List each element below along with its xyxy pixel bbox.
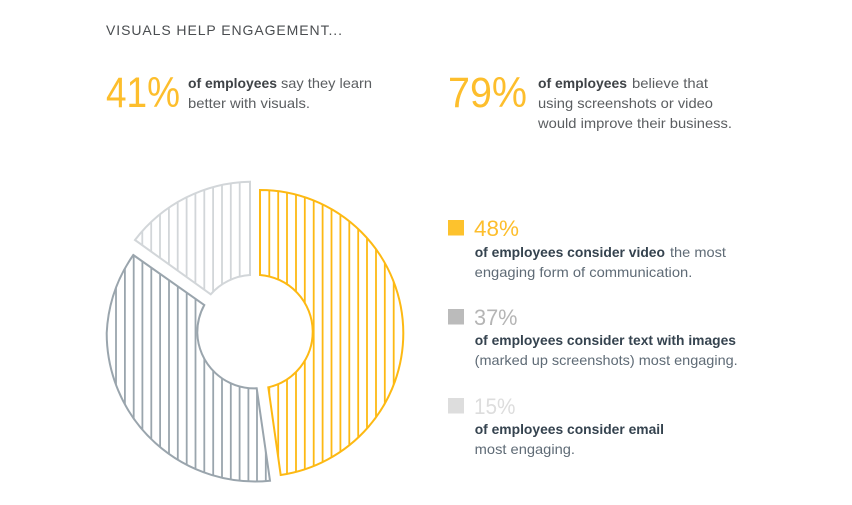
stat: 79% improve business: using screenshots or video bbox=[538, 95, 713, 111]
stat: 41% learn better bbox=[106, 69, 372, 117]
swatch: yellow bbox=[448, 220, 464, 236]
legend: 48% video: the most bbox=[670, 244, 726, 260]
stat: 41% learn better: say they learn bbox=[281, 75, 372, 91]
legend: 48% video bbox=[448, 216, 726, 280]
legend: 37% text with images bbox=[448, 305, 738, 368]
legend: 37% text with images: (marked up screenshots) most engaging. bbox=[475, 352, 738, 368]
legend: 15% email: of employees consider email bbox=[475, 421, 664, 437]
segment: 37% text with images bbox=[106, 254, 272, 482]
legend: 37% text with images: of employees consider text with images bbox=[475, 332, 736, 348]
legend: 15% email: 15% bbox=[474, 394, 516, 419]
infographic bbox=[106, 26, 736, 482]
legend: 48% video: engaging form of communication. bbox=[475, 264, 692, 280]
legend: 15% email bbox=[448, 394, 664, 457]
stat: 79% improve business bbox=[448, 69, 732, 131]
swatch: light gray bbox=[448, 398, 464, 414]
segment: 48% video bbox=[260, 180, 403, 490]
heading: VISUALS HELP ENGAGEMENT... bbox=[106, 22, 342, 38]
stat: 79% improve business: of employees bbox=[538, 75, 627, 91]
legend: 15% email: most engaging. bbox=[475, 441, 575, 457]
stat: 41% learn better: better with visuals. bbox=[188, 95, 310, 111]
stat: 41% learn better: 41% bbox=[106, 69, 180, 117]
stat: 79% improve business: believe that bbox=[632, 75, 708, 91]
legend: 37% text with images: 37% bbox=[474, 305, 518, 330]
segment: 15% email bbox=[135, 170, 250, 300]
swatch: gray bbox=[448, 309, 464, 324]
stat: 79% improve business: 79% bbox=[448, 69, 527, 117]
legend: 48% video: of employees consider video bbox=[475, 244, 665, 260]
stat: 79% improve business: would improve their business. bbox=[537, 115, 732, 131]
legend: 48% video: 48% bbox=[474, 216, 519, 241]
stat: 41% learn better: of employees bbox=[188, 75, 277, 91]
donut chart bbox=[107, 170, 403, 490]
